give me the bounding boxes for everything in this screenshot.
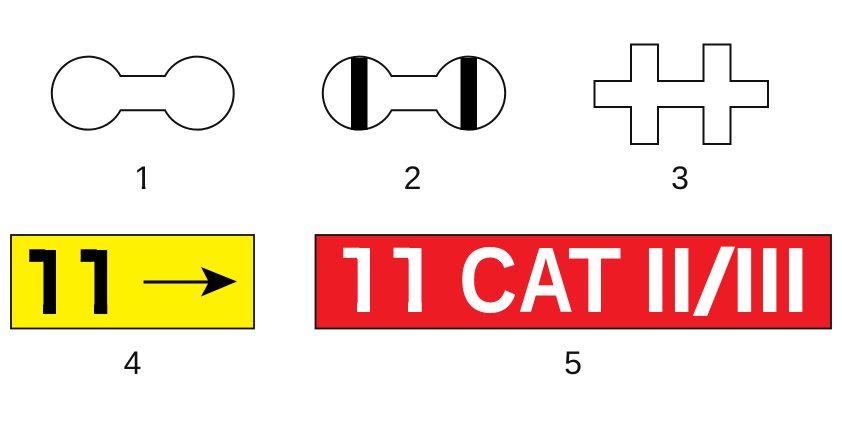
sign 4 arrow: [144, 267, 237, 296]
sign 5: red CAT II/III holding sign: [316, 228, 831, 334]
infographic canvas: [10, 44, 832, 374]
label 5: 5: [564, 345, 582, 381]
sign 5 text: C: [459, 229, 517, 332]
sign 5 text: T: [568, 229, 621, 333]
marking 2: dumbbell with black bars: [323, 57, 505, 130]
sign 4 number: [29, 249, 108, 314]
sign 5 text: III: [732, 228, 809, 332]
marking 1: plain dumbbell outline: [52, 57, 234, 130]
label 3: 3: [671, 160, 689, 196]
sign 5 text: A: [518, 229, 574, 333]
sign 5 text: [343, 246, 802, 316]
label 1: 1: [134, 160, 152, 196]
label 4: 4: [124, 345, 141, 381]
sign 4 number: 11: [22, 230, 125, 334]
label 2: 2: [404, 160, 421, 196]
sign 5 text: /: [689, 230, 739, 334]
sign 5 text: 11: [336, 228, 439, 332]
sign 4: yellow runway direction sign: [11, 230, 254, 334]
marking 3: double cross outline: [594, 44, 768, 144]
sign 5 text: II: [643, 228, 695, 332]
